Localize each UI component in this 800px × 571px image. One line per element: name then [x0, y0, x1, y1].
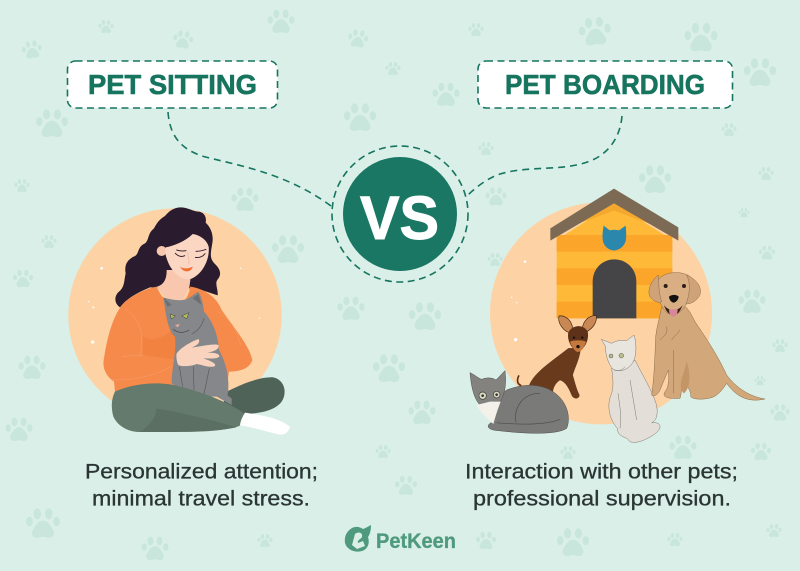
caption: pet sitting benefits: minimal travel stress. — [92, 488, 310, 510]
sweater — [103, 287, 252, 392]
connector: pet sitting to VS — [168, 112, 331, 206]
connector: pet boarding to VS — [467, 116, 622, 196]
cat sign — [603, 226, 626, 250]
caption: pet sitting benefits — [85, 460, 318, 510]
VS badge — [332, 146, 468, 282]
sparkles — [88, 267, 260, 344]
logo: PetKeen: PetKeen — [376, 530, 456, 553]
caption: pet sitting benefits: Personalized attention; — [85, 460, 318, 484]
neck and chest — [157, 270, 192, 305]
eyes, brows, mouth — [175, 249, 206, 258]
sweater shading — [112, 308, 241, 380]
cat body — [163, 292, 232, 405]
roof — [550, 189, 678, 241]
sock — [240, 413, 290, 435]
door — [593, 259, 636, 318]
far leg — [223, 377, 285, 414]
caption: pet boarding benefits: Interaction with other pets; — [465, 460, 738, 484]
hair — [115, 207, 220, 307]
caption: pet boarding benefits: professional supervision. — [473, 488, 731, 510]
cat face details — [163, 294, 209, 394]
label: pet sitting — [68, 61, 278, 108]
ear — [157, 246, 167, 256]
illustration: woman hugging a cat — [68, 207, 290, 435]
backdrop circle — [490, 202, 712, 424]
near leg — [112, 383, 244, 432]
dog house walls — [557, 203, 672, 318]
dog house stripes — [557, 235, 672, 318]
VS badge: VS — [360, 184, 439, 252]
logo: PetKeen — [345, 525, 456, 553]
sparkles — [511, 260, 526, 341]
caption: pet boarding benefits — [465, 460, 738, 510]
golden retriever — [649, 273, 765, 400]
gray lying cat — [470, 371, 568, 433]
hand — [176, 339, 219, 367]
face — [165, 234, 209, 279]
white cat — [601, 335, 660, 442]
illustration: dog house with cats and dogs — [470, 189, 765, 442]
backdrop circle — [68, 208, 282, 422]
label: pet boarding — [478, 61, 732, 108]
label: pet boarding: PET BOARDING — [505, 69, 705, 100]
small brown dog — [518, 316, 596, 398]
label: pet sitting: PET SITTING — [88, 69, 257, 100]
